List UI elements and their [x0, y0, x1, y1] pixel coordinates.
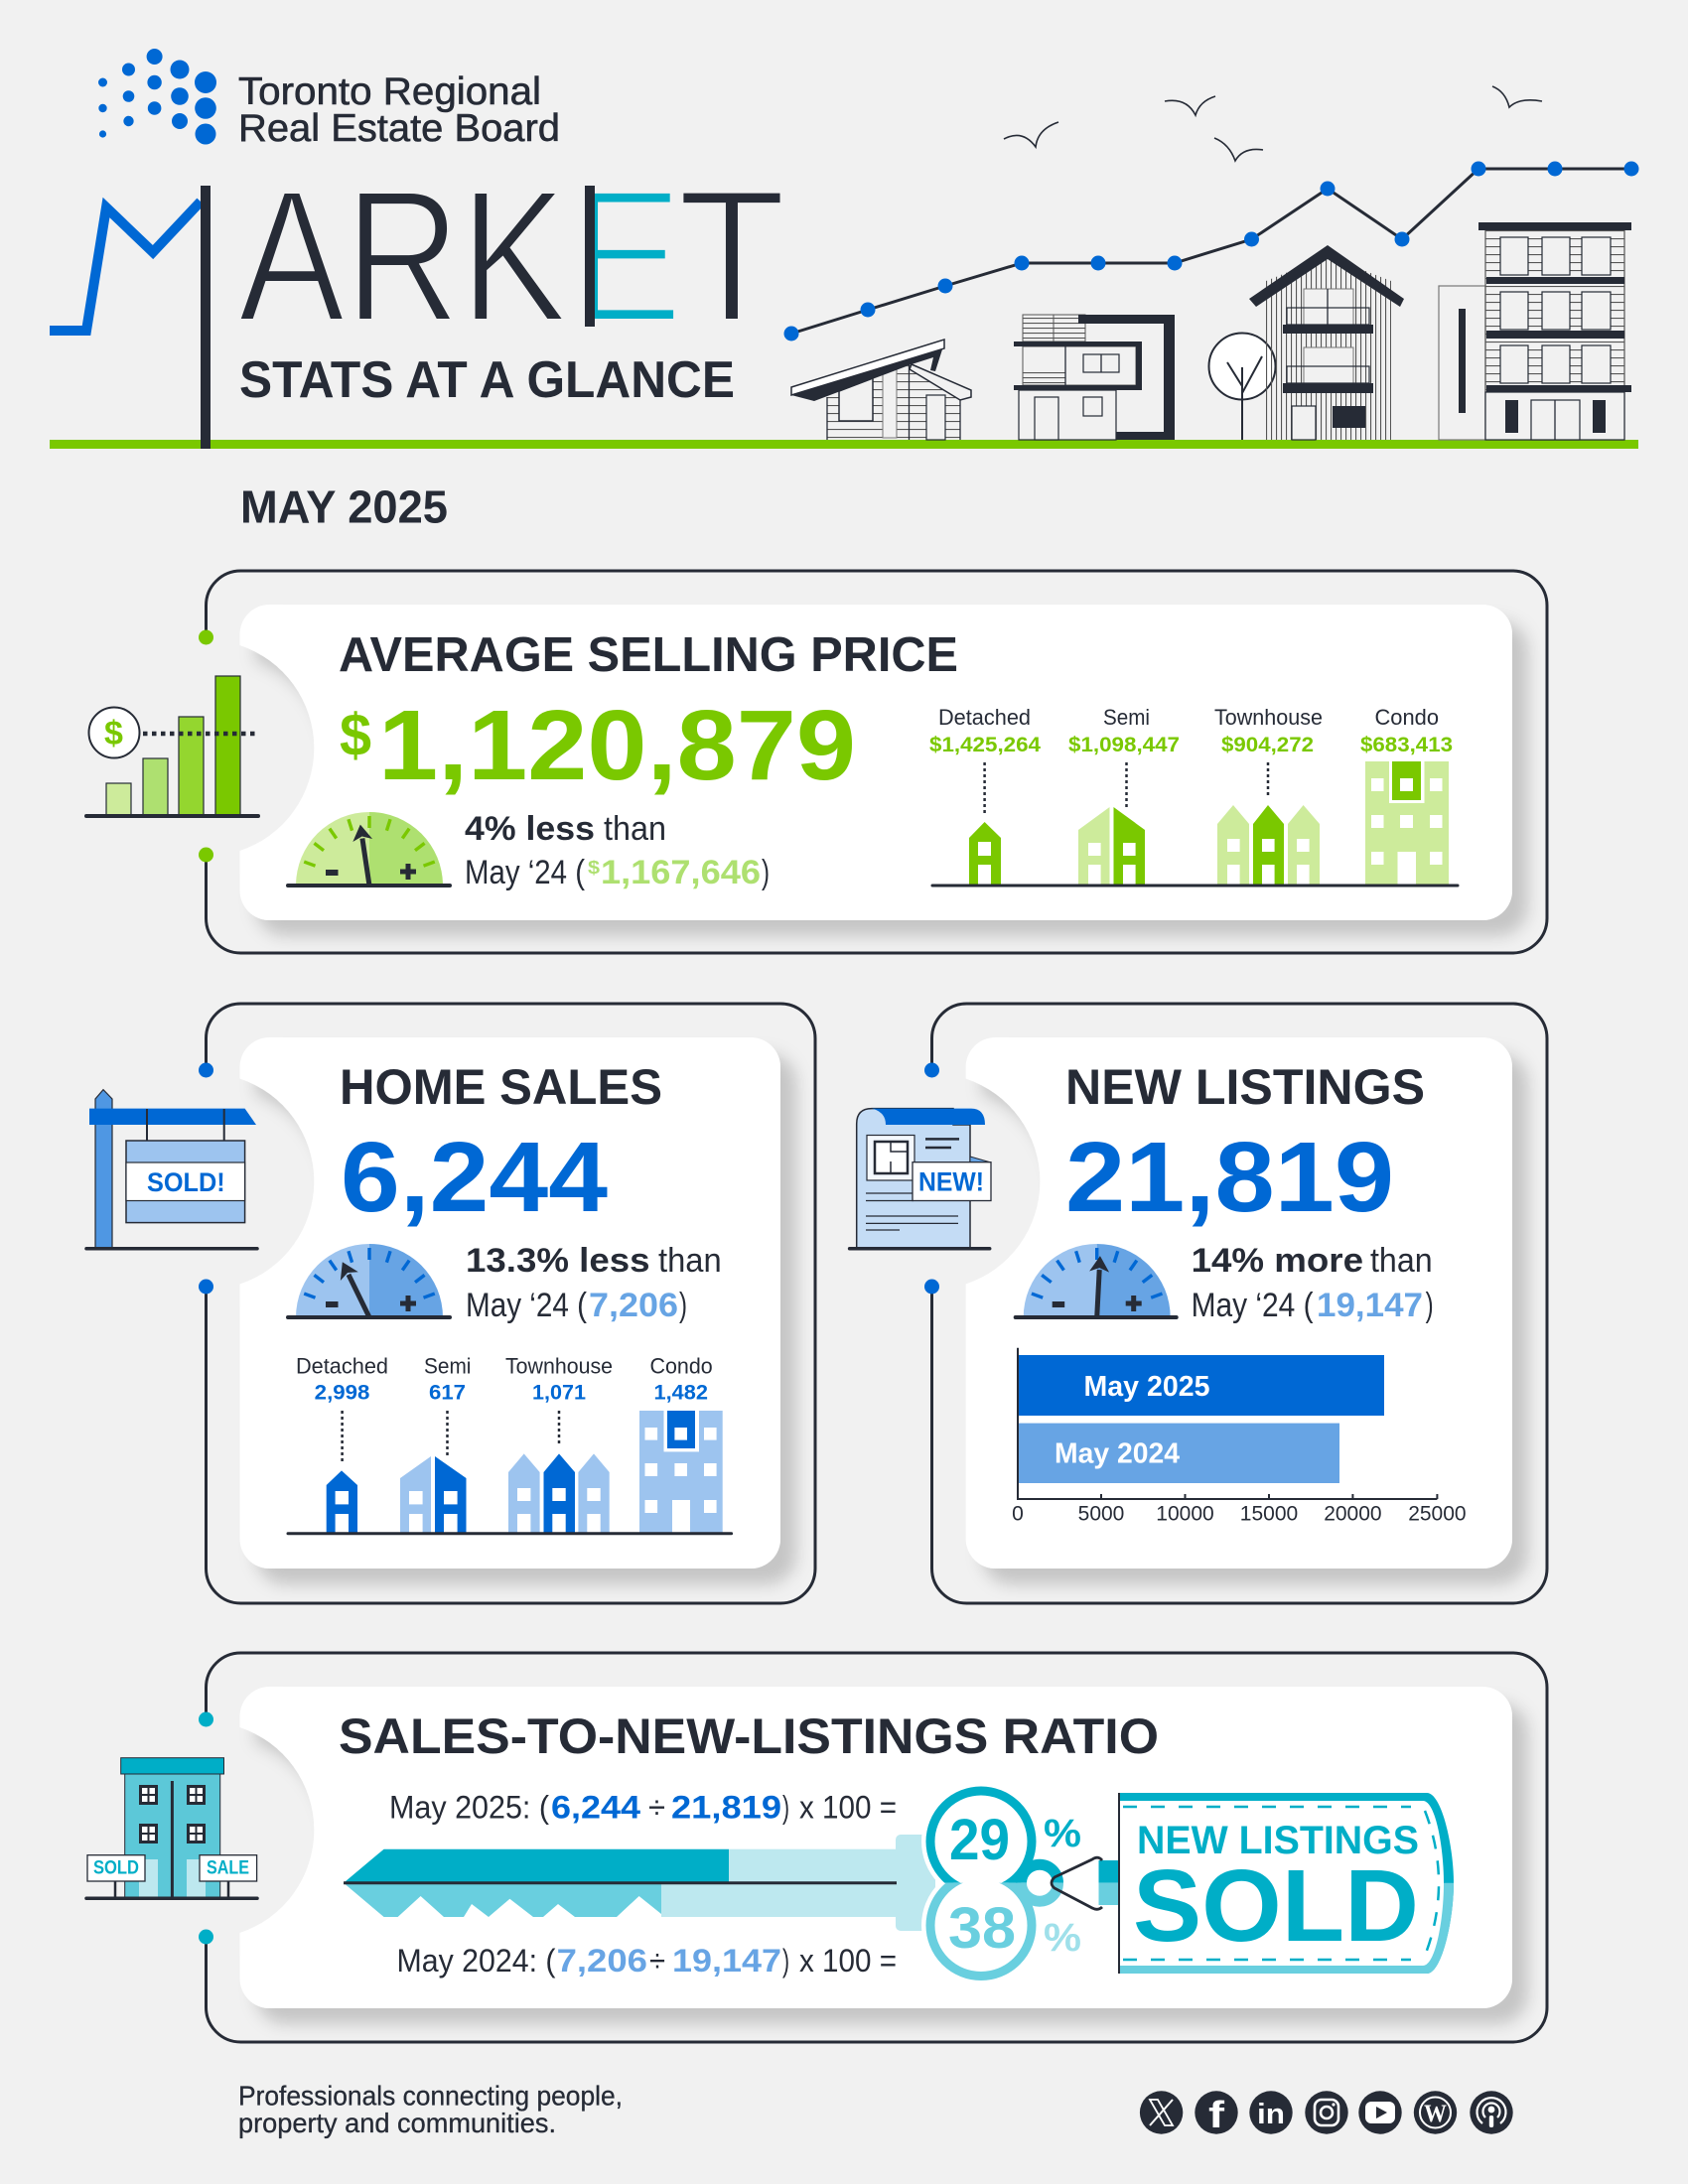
outline dots	[924, 1062, 939, 1295]
formula: May 2025: )	[782, 1790, 789, 1826]
heading: NEW LISTINGS	[1065, 1059, 1425, 1115]
bar chart: May 2025 vs May 2024: 10000	[1156, 1503, 1214, 1526]
gauge	[288, 1244, 450, 1321]
icon: podcast	[1470, 2091, 1513, 2134]
comparison text: 7,206	[589, 1287, 678, 1324]
comparison text: May ‘24 (	[1192, 1287, 1314, 1324]
icon: YouTube	[1358, 2091, 1402, 2134]
comparison text	[465, 810, 770, 891]
comparison text: May ‘24 (	[466, 1287, 588, 1324]
bar chart: May 2025 vs May 2024: 5000	[1078, 1503, 1124, 1526]
panel: new listings	[850, 1004, 1547, 1603]
logo wordmark: Real Estate Board	[238, 107, 560, 150]
big number: 21,819	[1065, 1122, 1394, 1233]
sold tag	[1052, 1793, 1454, 1974]
card	[240, 605, 1512, 920]
breakdown by home type: Townhouse	[505, 1353, 613, 1378]
bar chart: May 2025 vs May 2024: 20000	[1324, 1503, 1382, 1526]
panel: average selling price	[86, 571, 1547, 953]
comparison text: )	[679, 1287, 687, 1324]
bar chart: May 2025 vs May 2024	[1012, 1348, 1467, 1526]
icon: Instagram	[1305, 2091, 1348, 2134]
breakdown by home type: $683,413	[1360, 734, 1453, 756]
breakdown by home type: Condo	[649, 1353, 713, 1378]
breakdown by home type: Townhouse	[1214, 705, 1323, 730]
comparison text: )	[1426, 1287, 1434, 1324]
breakdown by home type: Detached	[938, 705, 1031, 730]
comparison text: 19,147	[1317, 1287, 1423, 1324]
comparison text: 4% less	[465, 810, 595, 848]
title: MARKET	[50, 149, 1638, 449]
vertical bar M	[201, 186, 211, 449]
panel outline	[931, 1004, 1547, 1603]
icon: LinkedIn	[1249, 2091, 1293, 2134]
breakdown by home type	[929, 705, 1458, 886]
icon: rising bars with dollar: $	[104, 715, 123, 752]
percent sign 2025: %	[1044, 1812, 1081, 1855]
breakdown by home type: $904,272	[1221, 734, 1314, 756]
panel outline	[207, 571, 1547, 953]
gauge	[288, 812, 450, 887]
icon: Facebook	[1195, 2091, 1238, 2136]
breakdown by home type: $1,098,447	[1068, 734, 1180, 756]
formula: May 2025: 6,244	[551, 1790, 640, 1826]
bar chart: May 2025 vs May 2024: 15000	[1240, 1503, 1298, 1526]
breakdown by home type: 2,998	[315, 1382, 370, 1404]
bar chart: May 2025 vs May 2024: May 2024	[1055, 1437, 1180, 1469]
panel: home sales	[86, 1004, 815, 1603]
formula: May 2024: May 2024: (	[397, 1943, 556, 1979]
bar chart: May 2025 vs May 2024: 25000	[1408, 1503, 1467, 1526]
comparison text: May ‘24 (	[465, 854, 586, 891]
comparison text	[466, 1242, 722, 1324]
icon: X	[1140, 2091, 1183, 2134]
logo: Toronto Regional Real Estate Board	[98, 49, 560, 150]
breakdown by home type: 1,482	[653, 1382, 708, 1404]
formula: May 2024: ÷	[649, 1943, 665, 1979]
big number: $	[340, 702, 371, 768]
formula: May 2025	[389, 1790, 897, 1826]
skyline illustration	[791, 222, 1631, 440]
formula: May 2024	[397, 1943, 897, 1979]
house 3	[1249, 245, 1404, 440]
icon: LinkedIn: in	[1257, 2099, 1285, 2130]
letter T: T	[677, 151, 786, 361]
letter E in teal: E	[571, 149, 683, 362]
icon: listing document: NEW!	[918, 1167, 984, 1197]
house 2	[1014, 315, 1175, 440]
icon: sold sign: SOLD!	[147, 1167, 225, 1197]
icon: condo building with signs	[86, 1758, 257, 1898]
formula: May 2025: May 2025: (	[389, 1790, 549, 1826]
heading: SALES-TO-NEW-LISTINGS RATIO	[339, 1708, 1159, 1764]
icon: condo building with signs: SOLD	[93, 1858, 139, 1879]
apartment building	[1439, 222, 1631, 440]
footer tagline	[238, 2081, 623, 2138]
logo dots	[98, 49, 216, 145]
panel: sales-to-new-listings ratio	[86, 1653, 1547, 2042]
bar chart: May 2025 vs May 2024: May 2025	[1084, 1371, 1209, 1403]
card	[966, 1037, 1512, 1569]
breakdown by home type: Semi	[1103, 705, 1150, 730]
percent sign 2024: %	[1044, 1916, 1081, 1960]
2024 ratio value: 38	[948, 1896, 1016, 1961]
letters ARK: ARK	[238, 152, 567, 361]
gauge	[1016, 1244, 1177, 1318]
comparison text: than	[604, 810, 666, 848]
icon: WordPress	[1414, 2091, 1457, 2134]
logo wordmark	[238, 70, 560, 150]
comparison text	[1192, 1242, 1434, 1324]
card	[240, 1687, 1512, 2008]
logo wordmark: Toronto Regional	[238, 70, 541, 113]
sold tag: NEW LISTINGS	[1137, 1819, 1419, 1862]
outline dots	[199, 629, 213, 862]
ratio rings	[925, 1786, 1081, 1981]
date heading: MAY 2025	[240, 480, 448, 532]
breakdown by home type: 617	[429, 1382, 466, 1404]
breakdown by home type: Detached	[296, 1353, 388, 1378]
outline dots	[199, 1062, 213, 1295]
comparison text: than	[1370, 1242, 1433, 1280]
subtitle: STATS AT A GLANCE	[239, 351, 735, 409]
formula: May 2024: )	[782, 1943, 789, 1979]
card	[240, 1037, 780, 1569]
big number: 6,244	[341, 1122, 608, 1233]
icon: Facebook: f	[1208, 2095, 1224, 2136]
social icons	[1140, 2091, 1513, 2136]
line chart over skyline	[784, 161, 1638, 341]
icon: condo building with signs: SALE	[207, 1858, 249, 1879]
footer tagline: Professionals connecting people,	[238, 2081, 623, 2112]
bar chart: May 2025 vs May 2024: 0	[1012, 1503, 1024, 1526]
vertical bar E	[585, 186, 595, 327]
icon: sold sign	[86, 1090, 257, 1249]
icon: listing document	[850, 1109, 991, 1249]
panel outline	[207, 1004, 815, 1603]
comparison text: 13.3% less	[466, 1242, 649, 1280]
icon: WordPress: W	[1424, 2101, 1447, 2127]
formula: May 2024: 19,147	[672, 1943, 781, 1979]
formula: May 2025: 21,819	[671, 1790, 781, 1826]
comparison text: than	[658, 1242, 722, 1280]
house 1	[791, 340, 971, 440]
small tag ring	[1016, 1858, 1063, 1883]
formula: May 2025: x 100 =	[799, 1790, 897, 1826]
icon: rising bars with dollar	[86, 676, 258, 816]
comparison text: $	[588, 858, 600, 878]
panel outline	[207, 1653, 1547, 2042]
footer tagline: property and communities.	[238, 2108, 556, 2138]
key illustration	[344, 1835, 935, 1931]
comparison text: )	[762, 854, 770, 891]
2025 ratio value: 29	[949, 1808, 1010, 1872]
tree	[1209, 334, 1275, 440]
heading: AVERAGE SELLING PRICE	[339, 627, 958, 682]
sold tag: SOLD	[1133, 1848, 1419, 1963]
breakdown by home type: Condo	[1374, 705, 1439, 730]
comparison text: 1,167,646	[601, 854, 761, 891]
formula: May 2024: x 100 =	[799, 1943, 897, 1979]
birds	[1004, 86, 1542, 161]
breakdown by home type: $1,425,264	[929, 734, 1041, 756]
breakdown by home type: Semi	[424, 1353, 471, 1378]
heading: HOME SALES	[340, 1059, 662, 1115]
breakdown by home type	[288, 1353, 732, 1534]
formula: May 2024: 7,206	[557, 1943, 647, 1979]
breakdown by home type: 1,071	[532, 1382, 586, 1404]
formula: May 2025: ÷	[648, 1790, 665, 1826]
comparison text: 14% more	[1192, 1242, 1363, 1280]
letter M as blue chart line	[50, 202, 201, 331]
green ground line	[50, 440, 1638, 449]
big number: 1,120,879	[378, 690, 856, 801]
outline dots	[199, 1711, 213, 1944]
